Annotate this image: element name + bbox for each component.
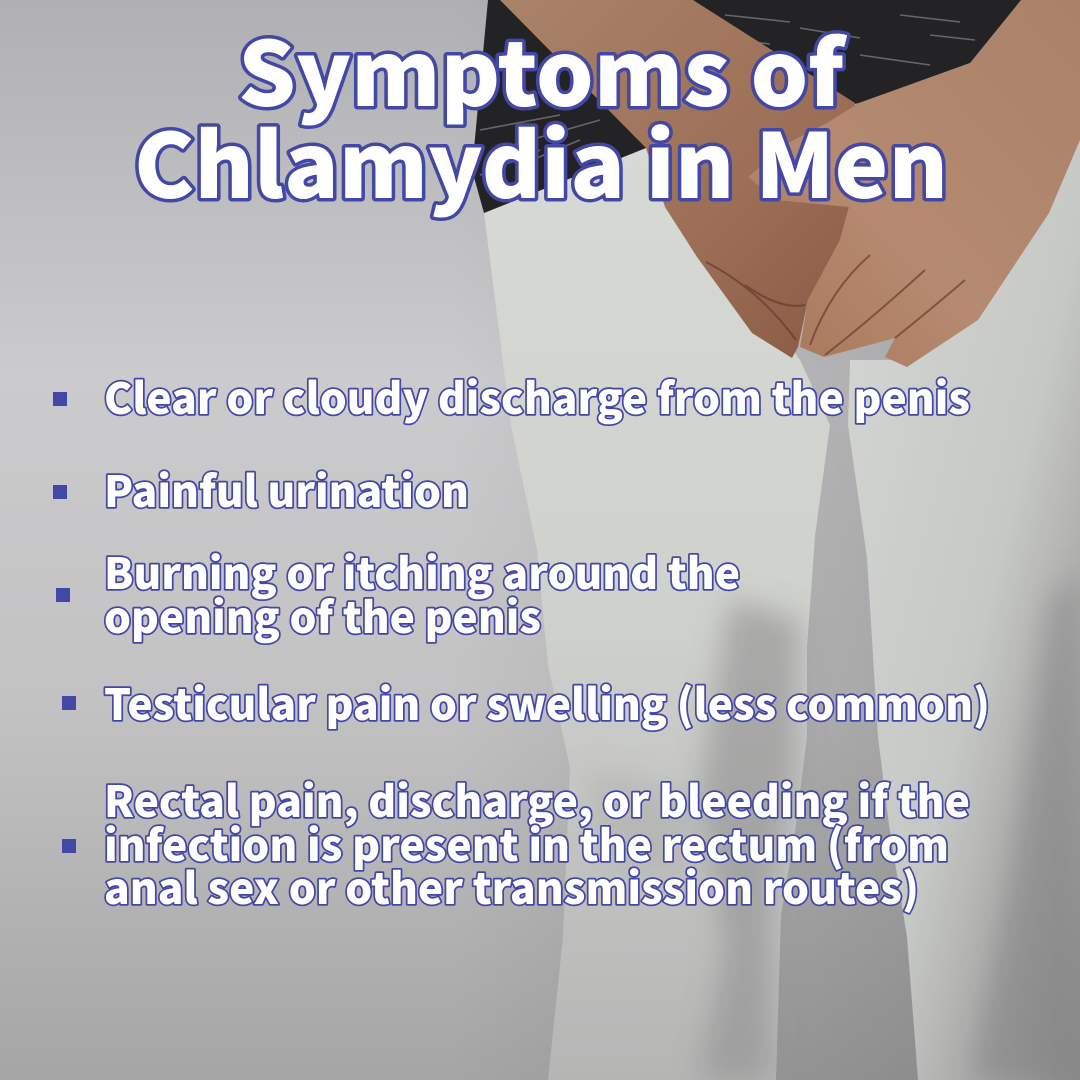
title: Chlamydia in Men — [134, 95, 948, 224]
title — [134, 3, 948, 224]
finger creases — [706, 255, 965, 355]
title: Symptoms of — [238, 3, 848, 132]
trousers: right leg — [848, 140, 1080, 1080]
symptom 5: infection is present in the rectum (from — [104, 812, 949, 874]
symptom 5: Rectal pain, discharge, or bleeding if the — [104, 768, 970, 830]
symptom 4: Testicular pain or swelling (less common) — [104, 671, 990, 733]
symptom 3 — [56, 540, 740, 646]
shirt streaks — [480, 15, 975, 175]
left arm and hand — [500, 0, 855, 358]
symptom 5 — [62, 768, 970, 917]
right arm and hand — [706, 0, 1080, 367]
symptom 5: anal sex or other transmission routes) — [104, 855, 919, 917]
shirt — [472, 0, 1030, 213]
symptom 3: Burning or itching around the — [104, 540, 740, 602]
symptom 3: opening of the penis — [104, 584, 541, 646]
symptom 1: Clear or cloudy discharge from the penis — [104, 365, 970, 427]
symptom list — [53, 365, 990, 917]
trousers: left leg — [484, 148, 830, 1080]
symptom 2: Painful urination — [104, 458, 469, 520]
